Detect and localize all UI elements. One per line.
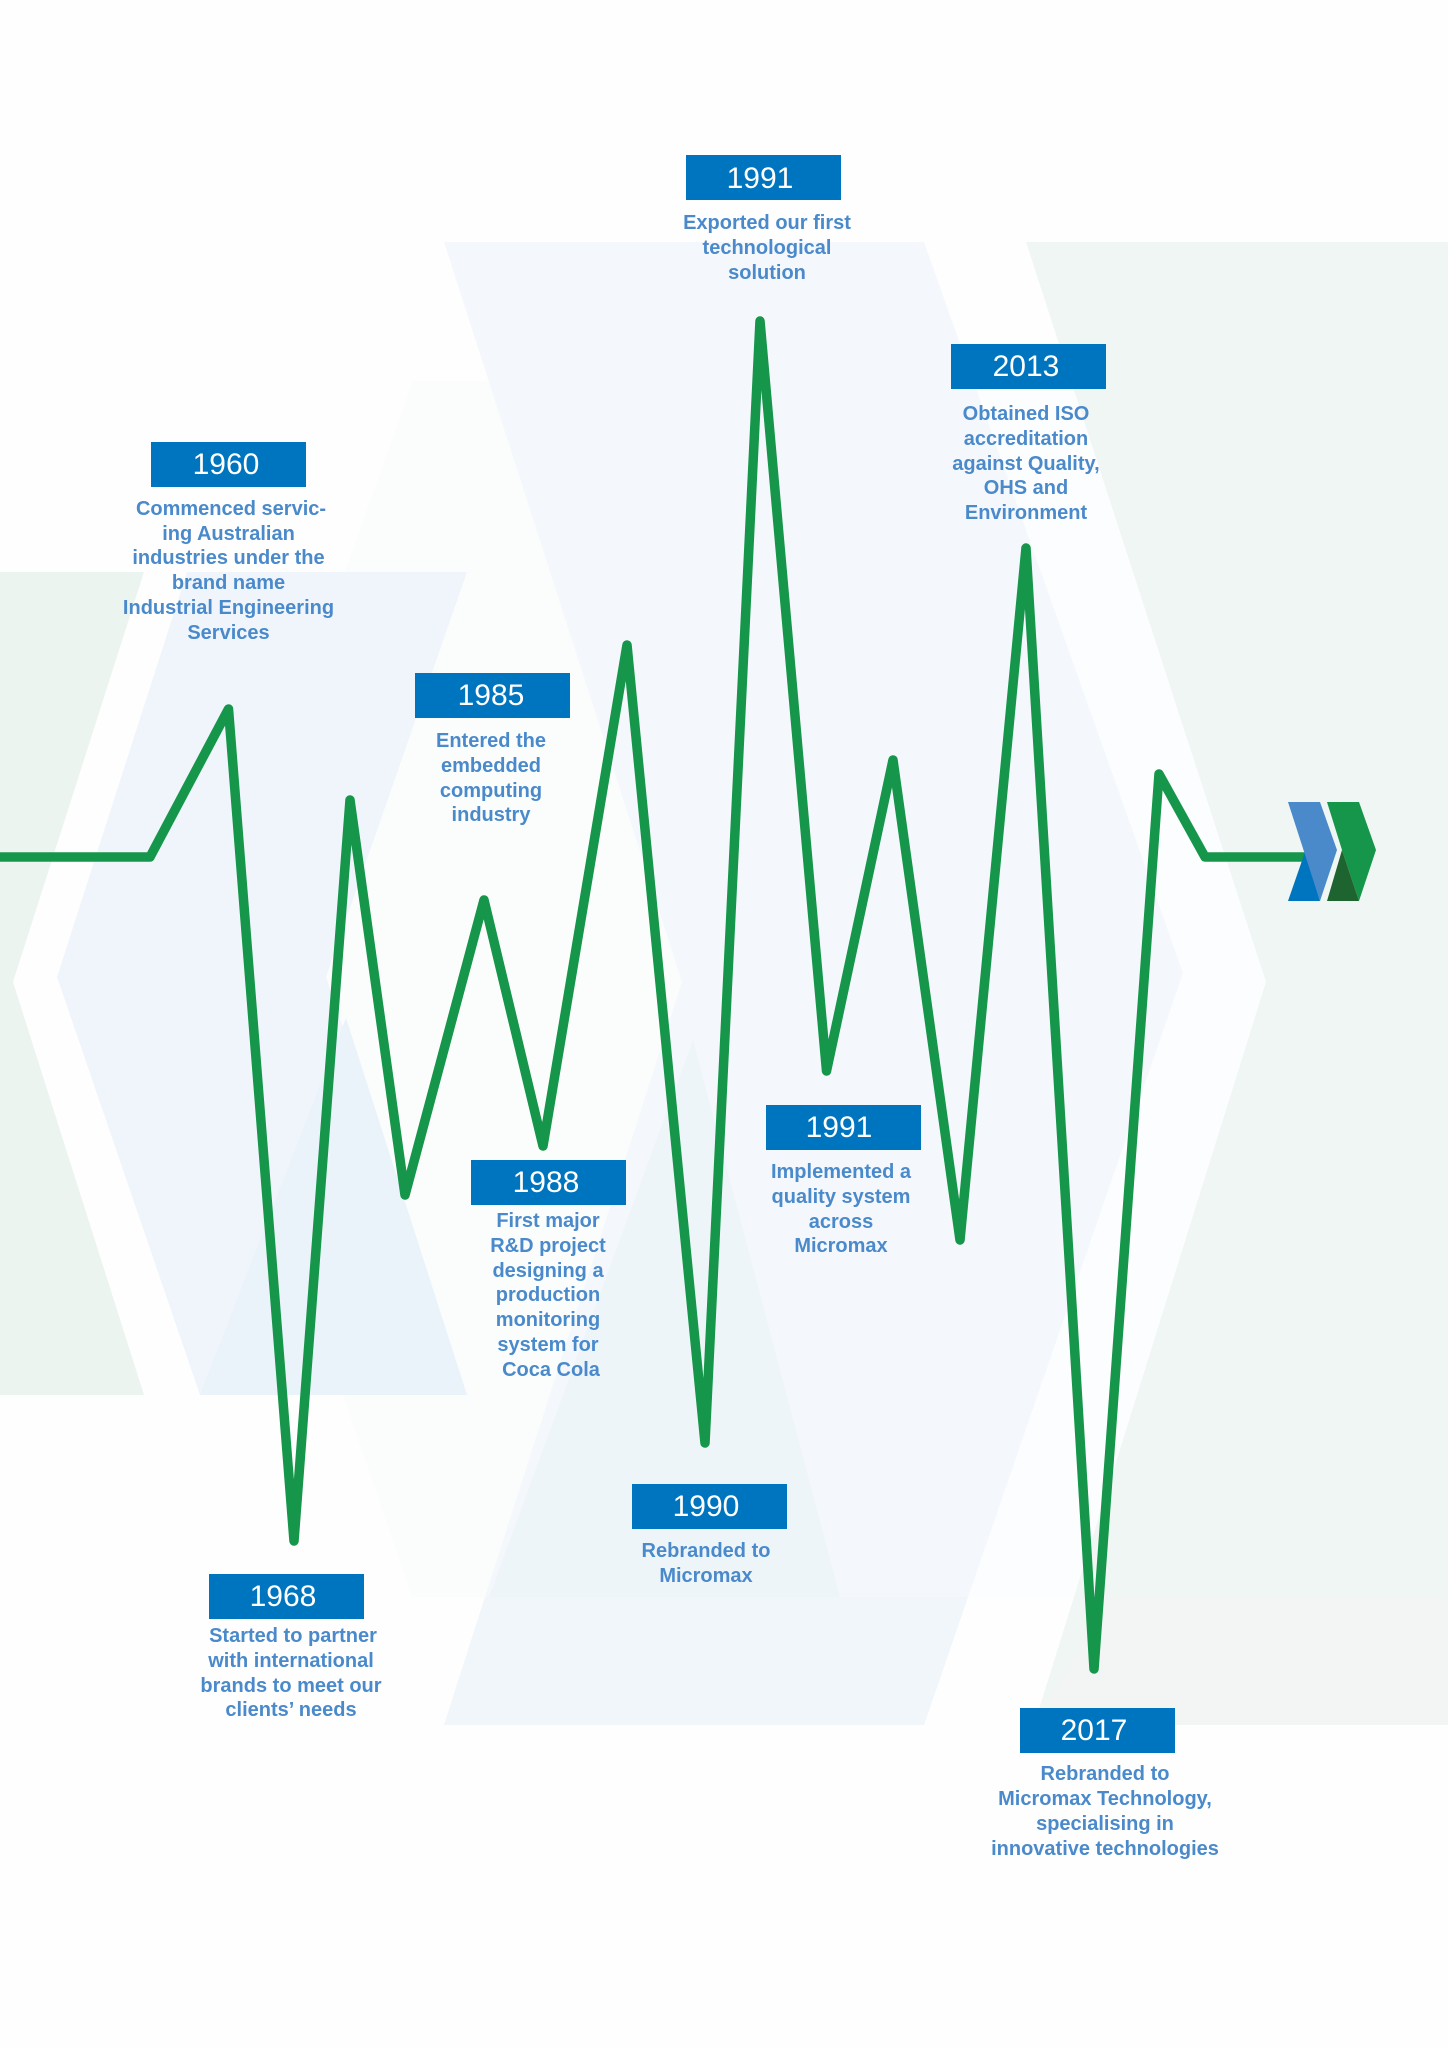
milestone 1991 first export: 1991: [727, 162, 793, 195]
milestone 1991 first export: Exported our first: [683, 212, 851, 234]
milestone 1960: brand name: [172, 572, 285, 594]
milestone 2013: Obtained ISO: [963, 403, 1089, 425]
milestone 1988: First major: [496, 1210, 600, 1232]
milestone 1991 quality system: across: [809, 1211, 873, 1233]
milestone 1988: monitoring: [496, 1309, 600, 1331]
milestone 2013: OHS and: [984, 477, 1068, 499]
milestone 1968: brands to meet our: [200, 1675, 382, 1697]
milestone 1990: Rebranded to: [642, 1540, 770, 1562]
milestone 2017: [991, 1708, 1219, 1860]
milestone 2017: specialising in: [1036, 1813, 1174, 1835]
milestone 1988: Coca Cola: [502, 1359, 601, 1381]
milestone 1991 first export: solution: [728, 262, 806, 284]
icon: double chevron logo: [1288, 802, 1376, 901]
milestone 2017: 2017: [1061, 1714, 1127, 1747]
milestone 1985: 1985: [458, 679, 524, 712]
milestone 1990: 1990: [673, 1490, 739, 1523]
milestone 1968: 1968: [250, 1580, 316, 1613]
milestone 2013: 2013: [993, 350, 1059, 383]
milestone 1968: with international: [207, 1650, 374, 1672]
milestone 1960: Industrial Engineering: [123, 597, 334, 619]
milestone 1985: industry: [452, 804, 531, 826]
milestone 1985: [415, 673, 570, 826]
milestone 1988: designing a: [492, 1260, 604, 1282]
milestone 1968: [200, 1574, 382, 1721]
milestone 1991 quality system: Micromax: [794, 1235, 888, 1257]
milestone 1991 quality system: Implemented a: [771, 1161, 912, 1183]
milestone 1985: embedded: [441, 755, 541, 777]
milestone 1990: Micromax: [659, 1565, 753, 1587]
milestone 1960: Commenced servic-: [136, 498, 326, 520]
milestone 1960: [123, 442, 334, 644]
milestone 1988: 1988: [513, 1166, 579, 1199]
milestone 1991 quality system: 1991: [806, 1111, 872, 1144]
milestone 2013: accreditation: [964, 428, 1088, 450]
milestone 2013: against Quality,: [952, 453, 1100, 475]
milestone 1991 first export: technological: [703, 237, 831, 259]
milestone 1990: [632, 1484, 787, 1587]
milestone 1991 quality system: quality system: [772, 1186, 910, 1208]
milestone 2017: Rebranded to: [1041, 1763, 1169, 1785]
milestone 1960: Services: [187, 622, 270, 644]
milestone 2017: Micromax Technology,: [998, 1788, 1212, 1810]
milestone 2013: Environment: [965, 502, 1087, 524]
milestone 1960: 1960: [193, 448, 259, 481]
milestone 1960: ing Australian: [162, 523, 295, 545]
milestone 1985: Entered the: [436, 730, 546, 752]
milestone 2017: innovative technologies: [991, 1838, 1219, 1860]
milestone 2013: [951, 344, 1106, 524]
zigzag timeline line: [0, 321, 1310, 1669]
milestone 1991 first export: [683, 155, 851, 284]
milestone 1991 quality system: [766, 1105, 921, 1257]
milestone 1968: clients’ needs: [225, 1699, 357, 1721]
milestone 1988: [471, 1160, 626, 1381]
milestone 1960: industries under the: [132, 547, 325, 569]
milestone 1988: production: [496, 1284, 600, 1306]
milestone 1985: computing: [440, 780, 542, 802]
milestone 1968: Started to partner: [209, 1625, 377, 1647]
milestone 1988: system for: [497, 1334, 599, 1356]
milestone 1988: R&D project: [490, 1235, 606, 1257]
